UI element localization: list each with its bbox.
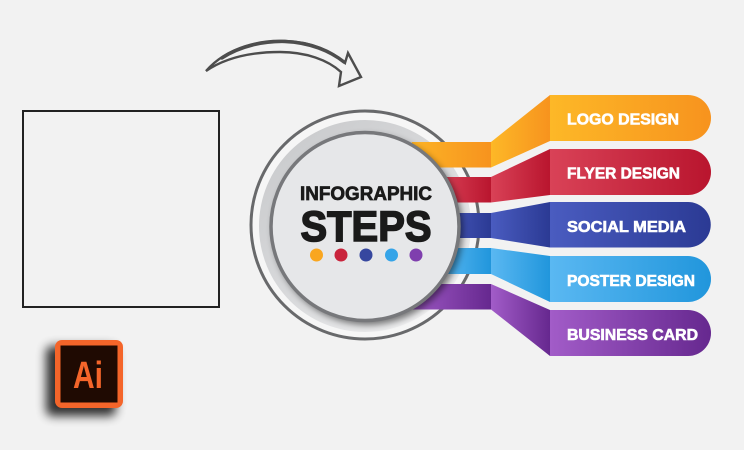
pill: business card: [550, 310, 711, 356]
inner disc: [271, 132, 459, 320]
center title: [300, 184, 432, 251]
colour dots: [310, 248, 422, 262]
pill: flyer design: FLYER DESIGN: [567, 166, 680, 182]
center title: INFOGRAPHIC: [300, 184, 432, 205]
center title: STEPS: [300, 203, 432, 251]
pill: poster design: [550, 256, 711, 302]
connector: poster design: [440, 248, 550, 302]
outer ring: [251, 111, 479, 339]
pill: logo design: [550, 95, 711, 141]
empty square frame: [23, 111, 219, 307]
pill: business card: BUSINESS CARD: [567, 327, 698, 344]
icon: Adobe Illustrator logo: Ai: [73, 355, 103, 397]
icon: curved arrow: [206, 41, 361, 86]
icon: Adobe Illustrator logo: [46, 340, 123, 416]
pill: poster design: POSTER DESIGN: [567, 273, 695, 290]
pill: logo design: LOGO DESIGN: [567, 112, 679, 128]
connector: logo design: [400, 95, 550, 168]
pill: flyer design: [550, 149, 711, 195]
pill: social media: [550, 202, 711, 248]
inner disc shadow: [273, 135, 463, 325]
connector: business card: [405, 284, 550, 356]
connector: flyer design: [440, 149, 550, 202]
connector: social media: [440, 202, 550, 248]
pill: social media: SOCIAL MEDIA: [567, 219, 686, 236]
